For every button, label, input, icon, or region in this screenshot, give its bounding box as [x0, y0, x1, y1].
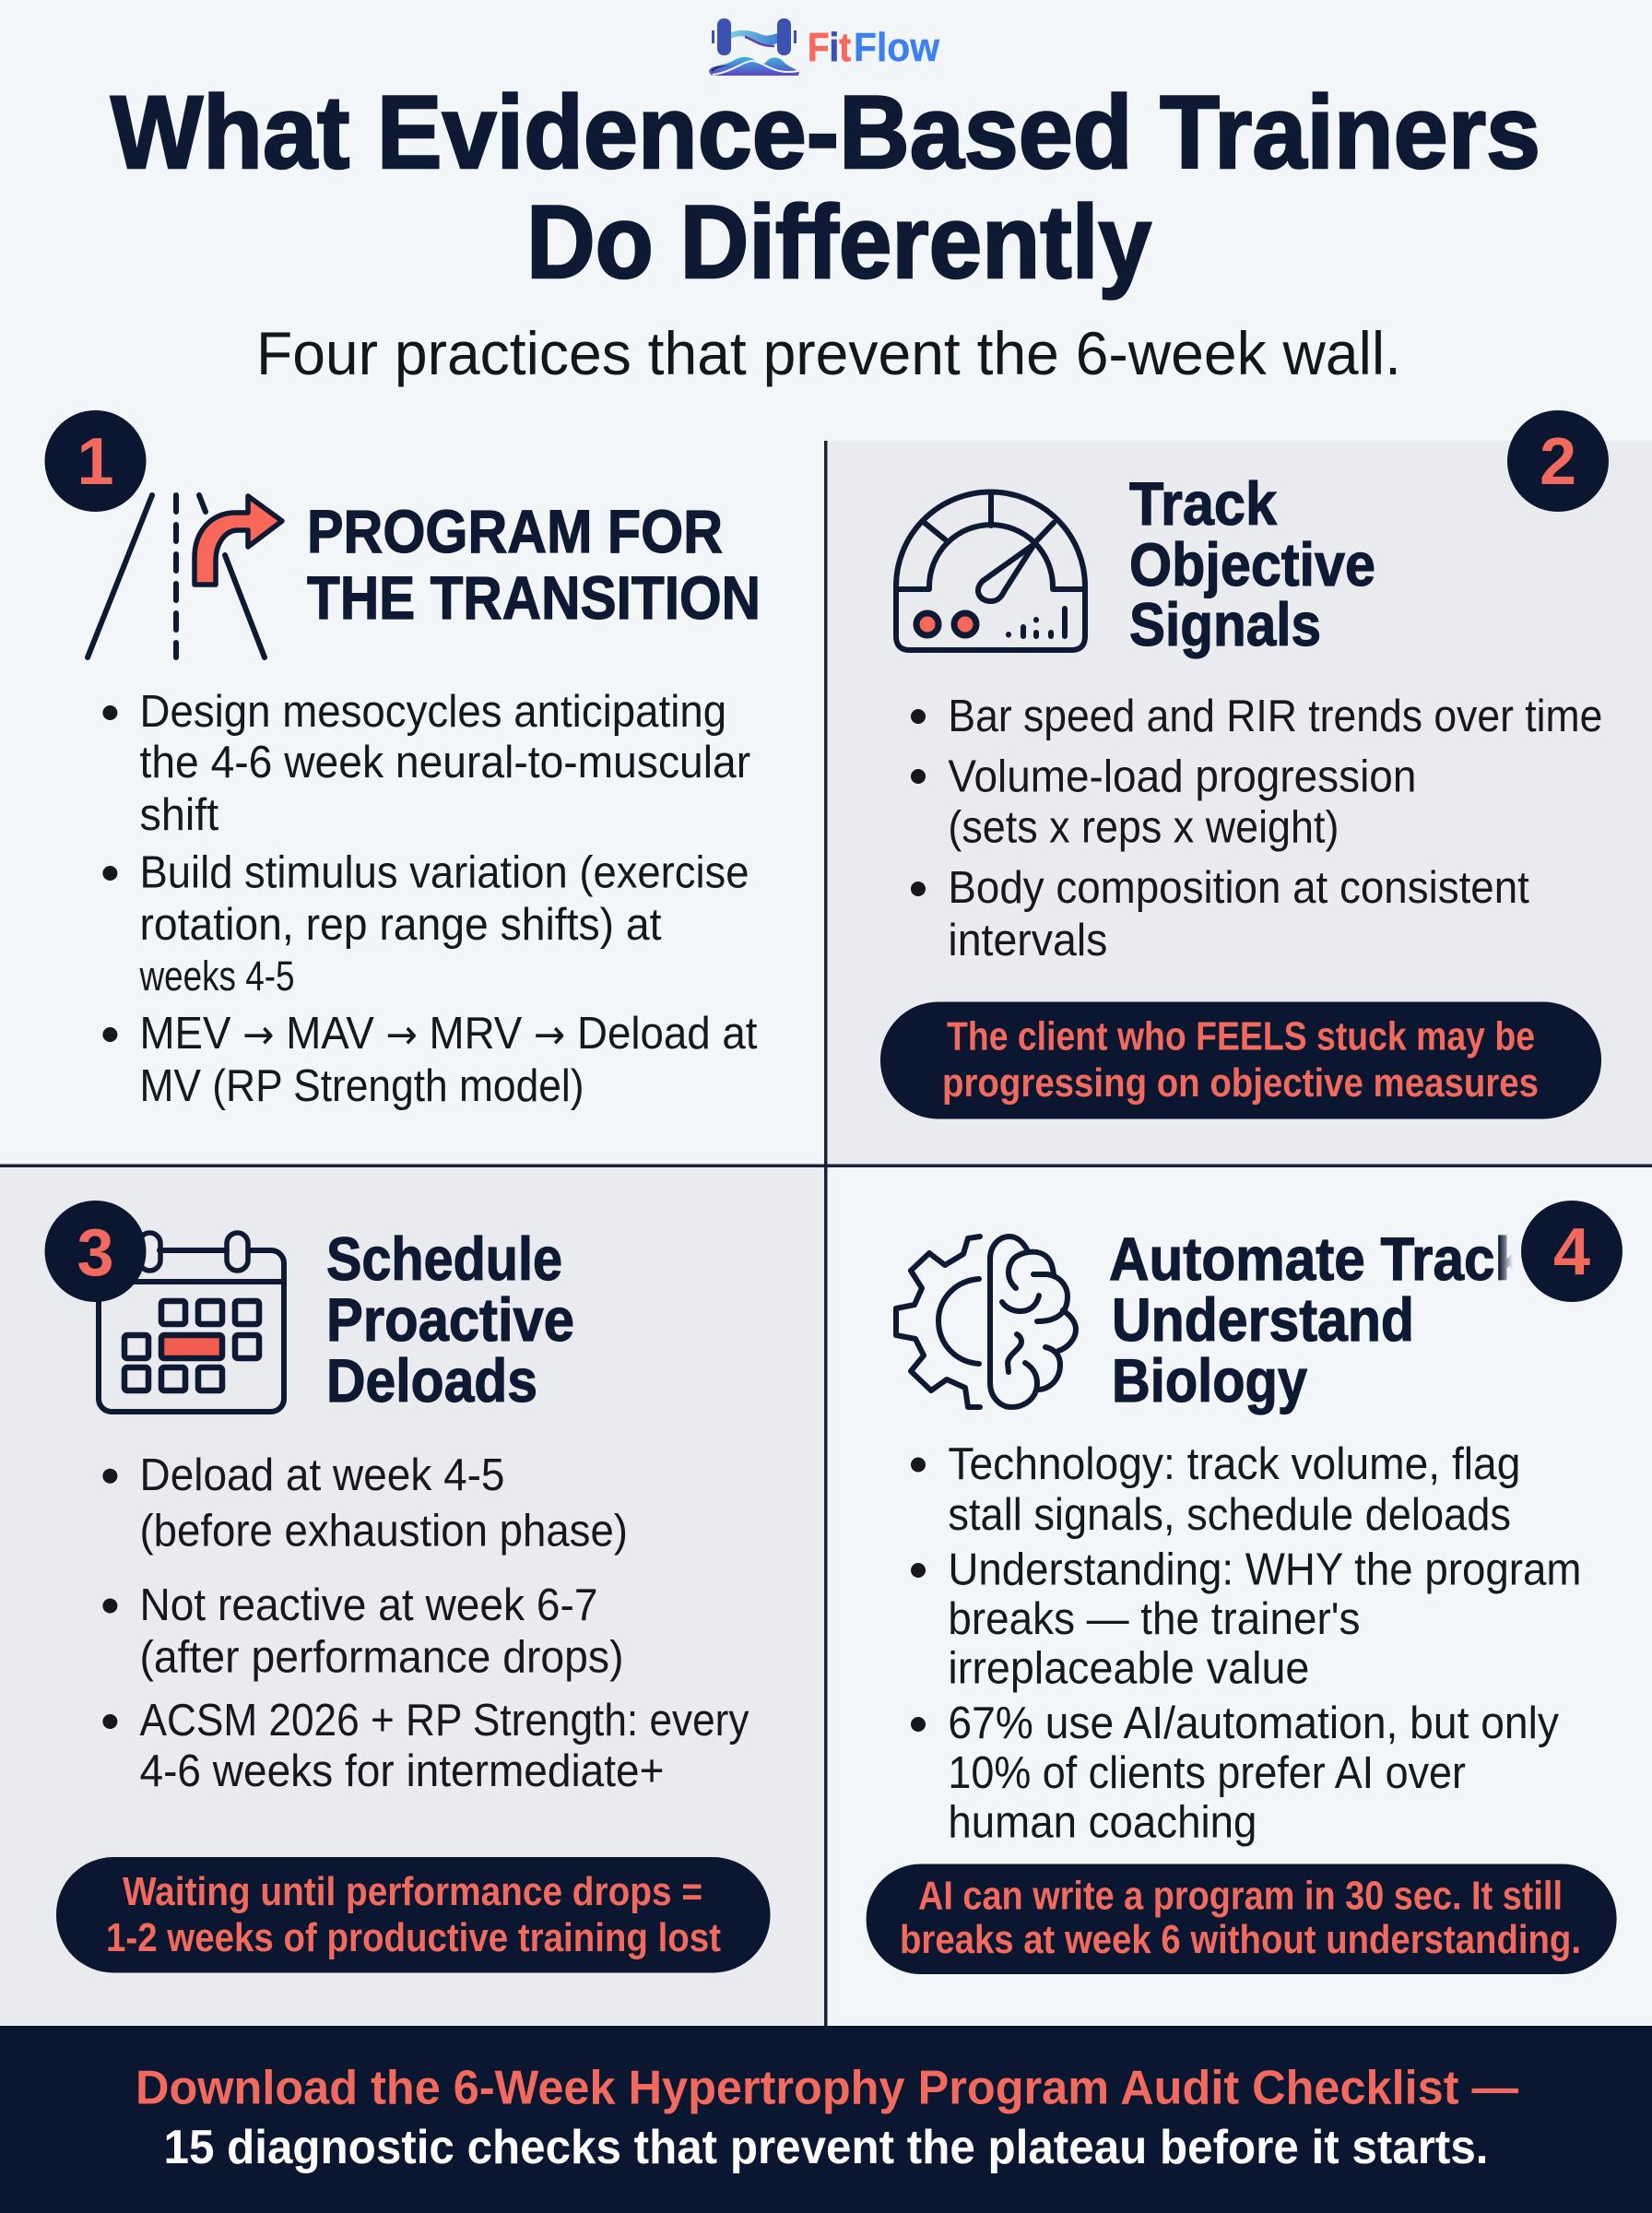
subtitle: Four practices that prevent the 6-week wall.	[256, 319, 1401, 387]
heading: Signals	[1129, 590, 1321, 658]
footer subline: 15 diagnostic checks that prevent the plateau before it starts.	[164, 2121, 1488, 2174]
heading	[1109, 1225, 1540, 1414]
heading: Track	[1129, 469, 1277, 538]
badge: number 2	[1507, 410, 1609, 512]
callout pill: Waiting until performance drops =	[123, 1869, 702, 1914]
title: What Evidence-Based Trainers	[111, 75, 1540, 190]
bullet list: MV (RP Strength model)	[140, 1061, 584, 1111]
bullet list: Volume-load progression	[948, 752, 1416, 802]
callout pill	[880, 1001, 1601, 1119]
panel 1: program for the transition	[0, 441, 825, 1166]
logo wordmark: Fit	[808, 25, 851, 70]
bullet list: human coaching	[948, 1798, 1257, 1848]
heading: PROGRAM FOR	[307, 497, 723, 565]
bullet list: weeks 4-5	[139, 953, 295, 1000]
bullet list	[102, 687, 758, 1111]
bullet list	[911, 1439, 1581, 1848]
bullet list: 10% of clients prefer AI over	[948, 1748, 1466, 1798]
bullet list: rotation, rep range shifts) at	[140, 900, 662, 950]
logo wordmark: Flow	[854, 25, 940, 70]
icon: gear and brain	[896, 1237, 1076, 1407]
bullet list	[911, 692, 1602, 965]
heading: Automate Track	[1109, 1225, 1526, 1293]
heading: THE TRANSITION	[307, 563, 761, 632]
bullet list: Technology: track volume, flag	[948, 1439, 1520, 1489]
badge: number 1	[44, 410, 146, 512]
panel 2: track objective signals	[828, 441, 1652, 1166]
bullet list: stall signals, schedule deloads	[948, 1490, 1511, 1540]
bullet list: (after performance drops)	[140, 1632, 623, 1682]
bullet list: MEV → MAV → MRV → Deload at	[140, 1009, 758, 1059]
title	[111, 75, 1540, 300]
callout pill	[56, 1857, 771, 1973]
bullet list: ACSM 2026 + RP Strength: every	[140, 1696, 749, 1746]
badge: number 2: 2	[1540, 425, 1576, 499]
bullet list: Build stimulus variation (exercise	[140, 848, 749, 898]
bullet list	[102, 1450, 749, 1796]
callout pill: AI can write a program in 30 sec. It still	[918, 1874, 1563, 1918]
callout pill: The client who FEELS stuck may be	[947, 1014, 1535, 1059]
bullet list: 4-6 weeks for intermediate+	[140, 1746, 664, 1796]
bullet list: Bar speed and RIR trends over time	[948, 692, 1602, 741]
callout pill: 1-2 weeks of productive training lost	[106, 1915, 721, 1960]
logo wordmark	[808, 25, 940, 70]
badge: number 3: 3	[77, 1216, 114, 1290]
heading: Objective	[1129, 530, 1375, 598]
bullet list: Body composition at consistent	[948, 863, 1529, 913]
badge: number 4: 4	[1553, 1215, 1590, 1289]
callout pill	[867, 1864, 1617, 1974]
panel 3: schedule proactive deloads	[0, 1167, 825, 2026]
heading: Schedule	[326, 1225, 562, 1293]
bullet list: Design mesocycles anticipating	[140, 687, 726, 737]
icon: barbell and wave	[709, 18, 799, 76]
icon: calendar	[99, 1233, 284, 1412]
heading	[1129, 469, 1375, 658]
callout pill: progressing on objective measures	[942, 1060, 1539, 1106]
bullet list: Deload at week 4-5	[140, 1450, 505, 1500]
badge: number 3	[44, 1201, 146, 1302]
title: Do Differently	[526, 184, 1151, 300]
bullet list: 67% use AI/automation, but only	[948, 1698, 1559, 1748]
bullet list: the 4-6 week neural-to-muscular	[140, 738, 750, 787]
bullet list: breaks — the trainer's	[948, 1594, 1360, 1644]
icon: road with turning arrow	[88, 495, 282, 657]
bullet list: (sets x reps x weight)	[948, 803, 1339, 853]
bullet list: irreplaceable value	[948, 1644, 1309, 1694]
bullet list: intervals	[948, 916, 1107, 965]
panel 4: automate track understand biology	[828, 1167, 1652, 2026]
heading: Proactive	[326, 1285, 574, 1354]
bullet list: Understanding: WHY the program	[948, 1545, 1581, 1595]
bullet list: shift	[140, 790, 219, 840]
logo: FitFlow	[709, 18, 940, 76]
heading: Biology	[1112, 1346, 1307, 1414]
badge: number 1: 1	[77, 425, 114, 499]
heading: Deloads	[326, 1346, 537, 1414]
footer headline: Download the 6-Week Hypertrophy Program Audit Checklist —	[136, 2062, 1518, 2115]
heading	[307, 497, 761, 632]
bullet list: Not reactive at week 6-7	[140, 1580, 597, 1630]
heading: Understand	[1112, 1285, 1414, 1354]
icon: gauge	[896, 492, 1085, 650]
footer banner: call to action	[0, 2026, 1652, 2213]
badge: number 4	[1521, 1201, 1622, 1302]
heading	[326, 1225, 574, 1414]
bullet list: (before exhaustion phase)	[140, 1507, 628, 1556]
